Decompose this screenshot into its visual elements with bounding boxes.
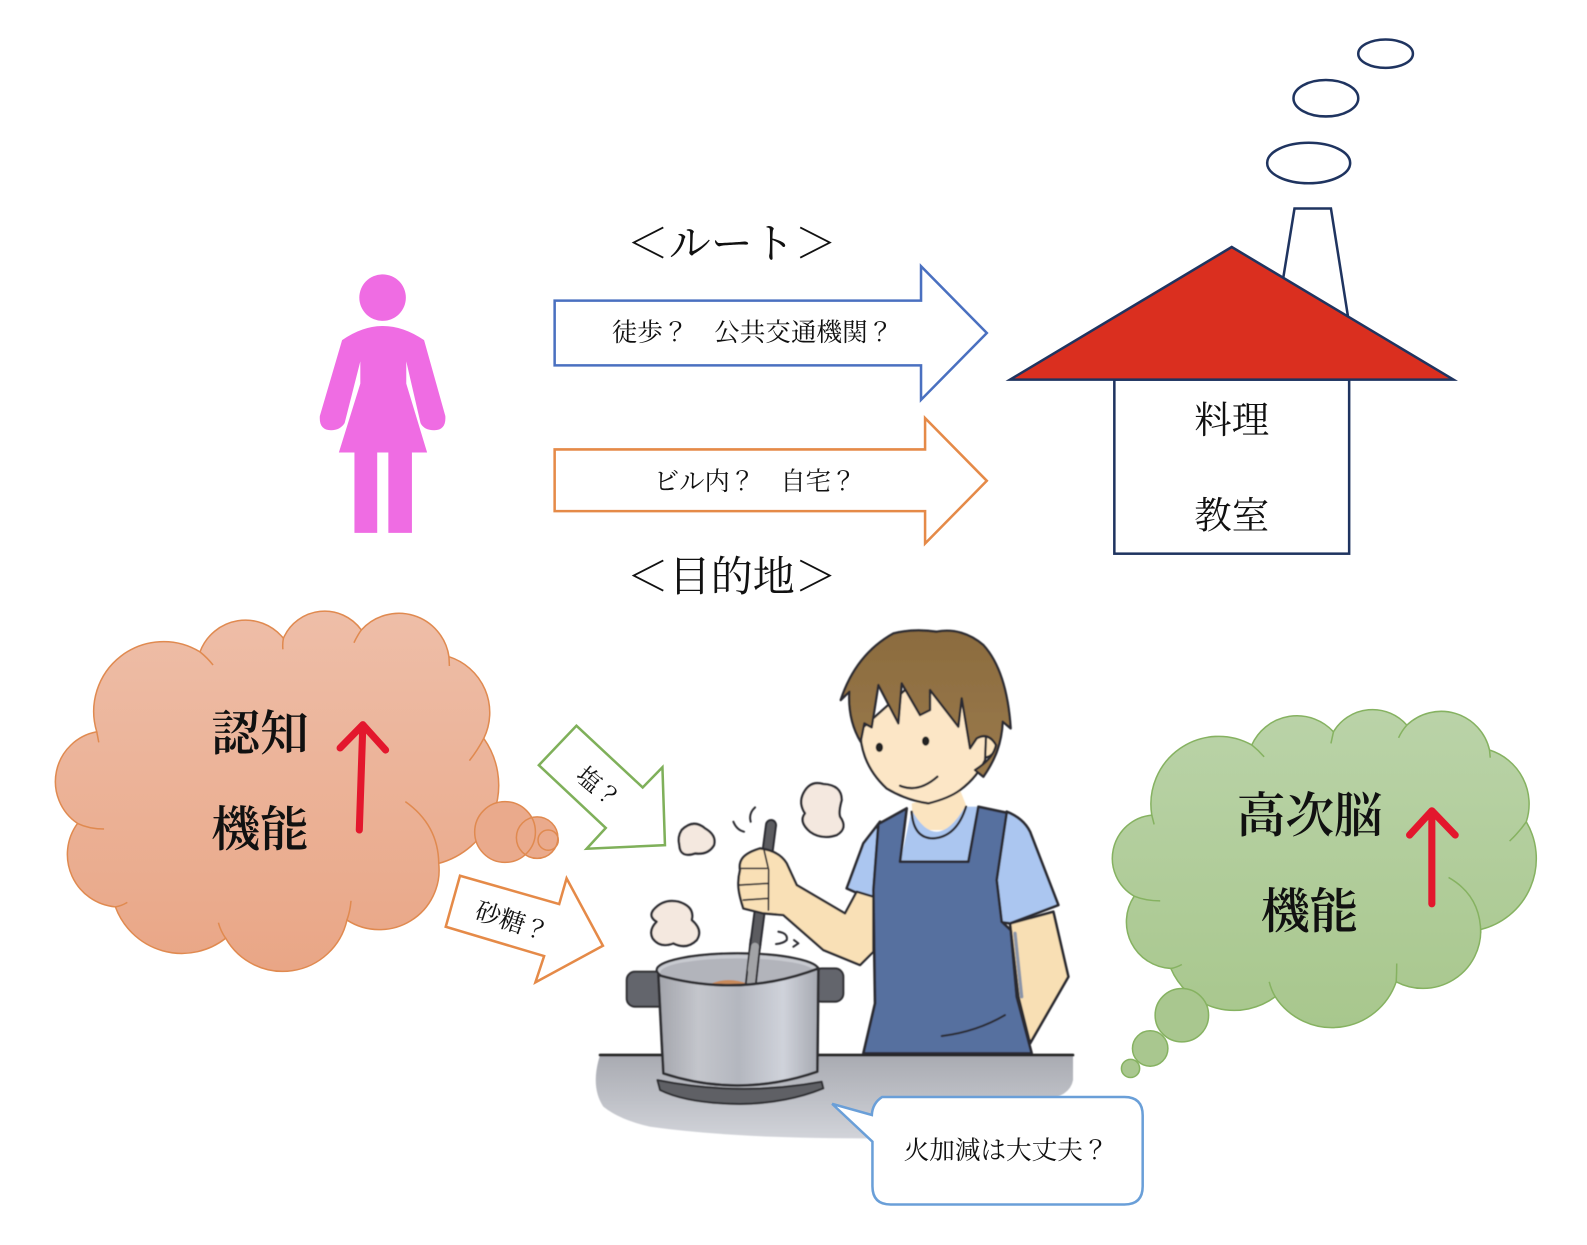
callout: heat check: 火加減は大丈夫？ (904, 1136, 1108, 1165)
soup (710, 980, 748, 984)
boy head (841, 630, 1011, 803)
cloud label (1237, 789, 1383, 939)
ear (971, 732, 996, 758)
arrow: sugar: 砂糖？ (472, 897, 553, 947)
handles (627, 972, 668, 1007)
ladle handle (755, 825, 771, 947)
rim (657, 953, 819, 987)
shirt body (900, 807, 978, 863)
chimney (1282, 209, 1349, 324)
illustration: person cooking at a pot (596, 630, 1073, 1138)
arrow: route options (555, 266, 987, 400)
arrow: salt (539, 726, 665, 849)
hair (841, 630, 1011, 777)
house label: 料理 (1194, 401, 1269, 442)
fingers (739, 850, 769, 910)
torso with shirt, arm and apron (847, 790, 1068, 1053)
cloud label (212, 707, 309, 857)
face (860, 677, 987, 803)
thought cloud: higher brain function (1112, 710, 1536, 1078)
ladle shaft in pot (751, 940, 756, 985)
arrow: sugar (446, 876, 603, 982)
cloud label: 機能 (1261, 885, 1358, 939)
motion marks (733, 807, 798, 947)
apron body (863, 807, 1032, 1053)
house label: 教室 (1194, 495, 1269, 537)
house label (1194, 401, 1269, 537)
right arm (1010, 912, 1068, 1043)
cloud label: 機能 (212, 803, 309, 857)
arrow: destination options: ビル内？ 自宅？ (654, 468, 856, 496)
pot with handles and burner (627, 940, 843, 1104)
burner (657, 1080, 823, 1104)
smile (900, 777, 937, 788)
arrow: destination options (555, 418, 987, 544)
icon: woman figure (320, 274, 445, 533)
red up arrow (1410, 811, 1455, 904)
arm, hand, ladle handle and steam (651, 783, 873, 970)
eyes (876, 743, 883, 752)
thought cloud: cognitive function (55, 611, 558, 971)
arrow: salt: 塩？ (570, 762, 625, 814)
heading: route: ＜ルート＞ (627, 222, 837, 268)
cloud label: 高次脳 (1237, 789, 1383, 843)
callout: heat check (832, 1097, 1143, 1204)
arrow: route options: 徒歩？ 公共交通機関？ (612, 318, 893, 347)
wall (1114, 380, 1349, 554)
steam puffs (651, 783, 843, 946)
pot body (658, 968, 818, 1085)
icon: house with cooking class (1010, 40, 1453, 554)
thought bubbles (1121, 988, 1209, 1078)
sleeves (847, 822, 887, 900)
cloud label: 認知 (212, 707, 309, 761)
smoke puffs (1267, 40, 1413, 183)
left arm and hand (738, 848, 873, 965)
counter top (596, 1055, 1073, 1138)
red up arrow (340, 725, 386, 830)
neck (912, 790, 967, 830)
heading: destination: ＜目的地＞ (627, 555, 837, 601)
roof (1010, 247, 1453, 380)
